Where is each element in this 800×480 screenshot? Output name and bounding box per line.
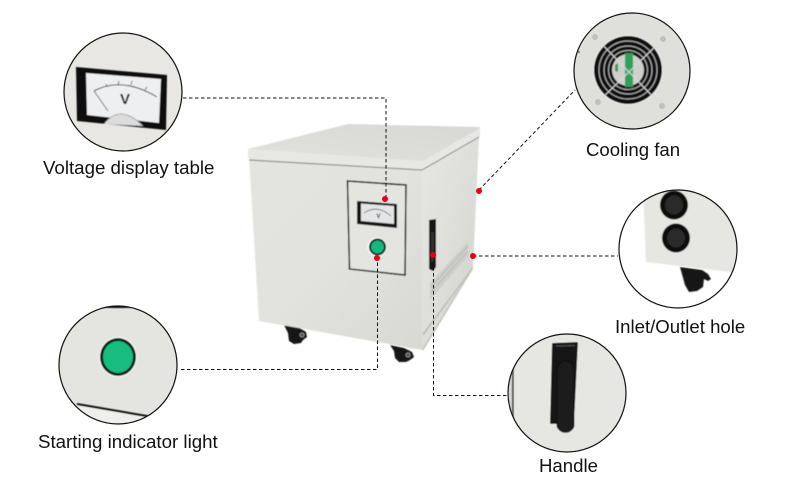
leader: indicator light: [181, 258, 378, 370]
circle: indicator close-up: [58, 305, 178, 425]
circle: voltmeter close-up: [63, 32, 183, 152]
caster: left: [284, 325, 307, 344]
label: Inlet/Outlet hole: [615, 316, 745, 337]
cabinet front face: [249, 158, 422, 350]
callout: handle: [507, 333, 627, 472]
product: transformer cabinet: [248, 124, 480, 362]
caster: right: [390, 345, 414, 362]
label: Starting indicator light: [38, 431, 219, 452]
cabinet top lid: [248, 124, 480, 170]
callout: starting indicator light: [38, 300, 219, 452]
circle: voltmeter close-up: V: [120, 91, 130, 108]
circle: handle close-up: [507, 333, 627, 453]
cabinet side face: [422, 137, 479, 351]
red marker dots: [374, 188, 482, 261]
leader: handle: [434, 255, 508, 396]
circle: fan close-up: [573, 12, 691, 130]
callout: voltage display table: [43, 30, 214, 178]
small voltmeter: V: [376, 214, 381, 220]
callout: inlet outlet hole: [615, 185, 745, 337]
circle: holes close-up: [618, 189, 738, 309]
leader: inlet outlet hole: [473, 255, 618, 257]
leader lines: [181, 90, 618, 396]
callout: cooling fan: [570, 10, 695, 160]
side handle: [429, 219, 436, 271]
control panel outline: [348, 181, 406, 275]
leader: voltage display: [183, 98, 386, 199]
label: Voltage display table: [43, 157, 214, 178]
leader: cooling fan: [479, 90, 575, 190]
small voltmeter: [357, 201, 397, 228]
label: Handle: [539, 455, 598, 476]
green indicator light: [368, 238, 386, 256]
label: Cooling fan: [586, 139, 680, 160]
